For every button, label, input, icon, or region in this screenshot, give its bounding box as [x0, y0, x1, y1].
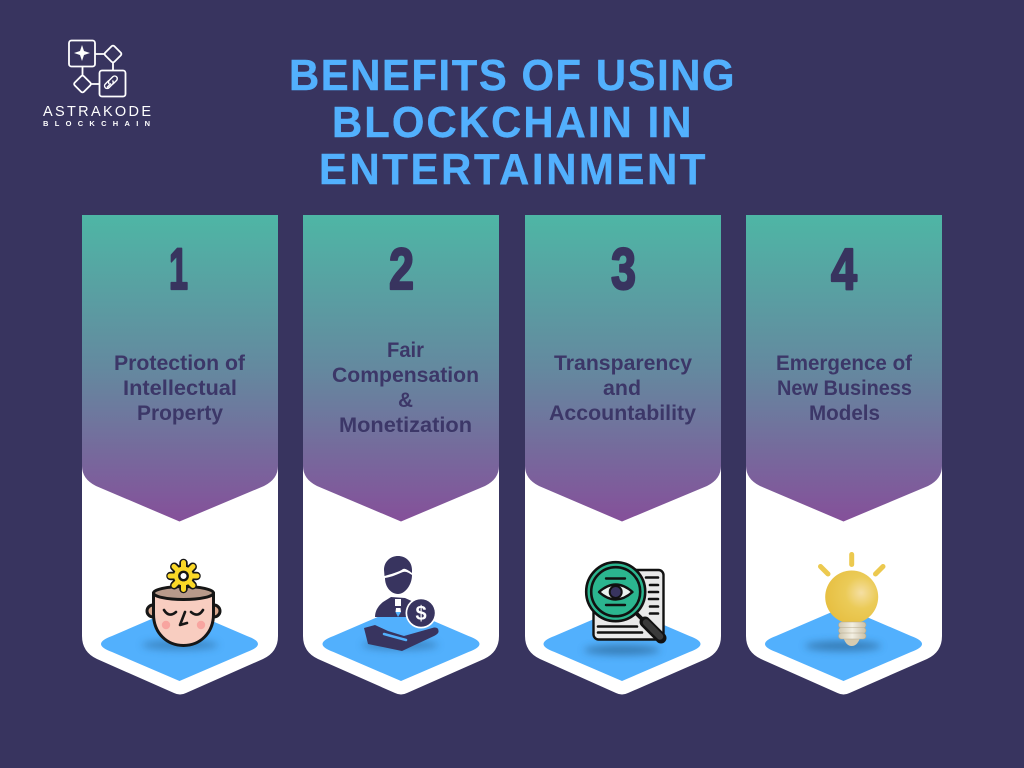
title: BENEFITS OF USING: [289, 51, 735, 100]
card 4 label: Emergence of: [776, 352, 913, 375]
card 2 number: 2: [389, 237, 414, 302]
card 4 blue platform: [765, 607, 922, 681]
card 2 label: Fair: [387, 339, 424, 362]
card 3 label: and: [603, 377, 641, 400]
card 4 label: [776, 352, 913, 425]
icon: light bulb: [820, 554, 883, 646]
card 2 white body: [303, 215, 499, 694]
card 4 gradient banner: [746, 215, 942, 522]
card 2 shadow: [362, 640, 438, 650]
card 4 number: 4: [831, 237, 857, 302]
card 1 white body: [82, 215, 278, 694]
card 1 label: Property: [137, 402, 223, 425]
card 1 number: 1: [169, 237, 188, 302]
panel: card 4: [746, 215, 942, 694]
panel: card 1: [82, 215, 278, 694]
card 1 label: Protection of: [114, 352, 246, 375]
card 4 shadow: [805, 641, 881, 651]
card 3 white body: [525, 215, 721, 694]
card 3 blue platform: [544, 607, 700, 681]
icon: person with coin on hand: $: [415, 603, 427, 625]
title: ENTERTAINMENT: [319, 145, 705, 194]
card 3 shadow: [584, 645, 660, 655]
card 1 label: [114, 352, 246, 425]
icon: magnifier over document: [586, 562, 664, 640]
logo: Astrakode Blockchain: BLOCKCHAIN: [43, 119, 150, 128]
card 3 number: 3: [611, 237, 636, 302]
card 1 shadow: [142, 640, 218, 650]
panel: card 2: [303, 215, 499, 694]
card 1 blue platform: [101, 607, 258, 681]
logo: Astrakode Blockchain: ASTRAKODE: [43, 104, 151, 120]
title: [289, 51, 735, 194]
card 2 blue platform: [322, 607, 480, 681]
icon: person with coin on hand: [364, 556, 439, 651]
icon: head with gear: [147, 562, 220, 646]
card 2 gradient banner: [303, 215, 499, 522]
card 1 gradient banner: [82, 215, 278, 522]
card 3 label: [549, 352, 696, 425]
title: BLOCKCHAIN IN: [332, 98, 692, 147]
card 4 label: Models: [809, 402, 880, 425]
card 4 white body: [746, 215, 942, 694]
panel: card 3: [525, 215, 721, 694]
card 2 label: Compensation: [332, 364, 479, 387]
card 2 label: [332, 339, 479, 437]
card 3 label: Transparency: [554, 352, 692, 375]
card 1 label: Intellectual: [123, 377, 237, 400]
logo: Astrakode Blockchain: [43, 40, 151, 128]
card 2 label: &: [398, 389, 413, 412]
card 3 label: Accountability: [549, 402, 696, 425]
card 4 label: New Business: [777, 377, 912, 400]
card 3 gradient banner: [525, 215, 721, 522]
card 2 label: Monetization: [339, 414, 472, 437]
